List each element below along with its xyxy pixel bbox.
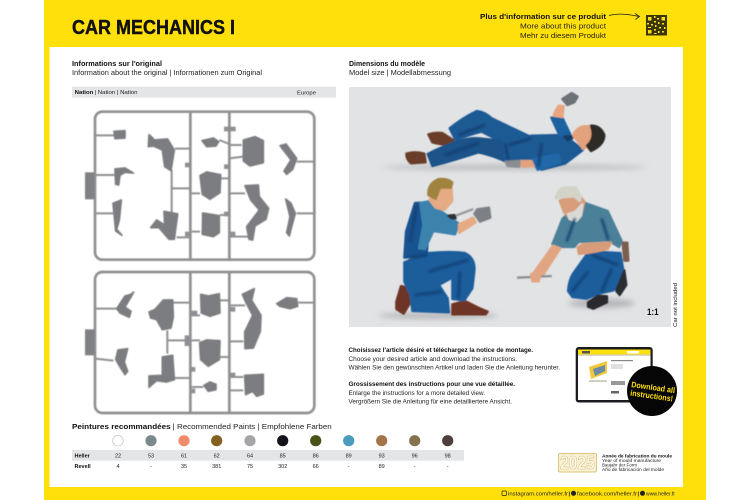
heading: recommended paints: Peintures recommandées	[72, 422, 171, 431]
nation row: Nation	[75, 90, 94, 96]
mould year text: Baujahr der Form	[602, 462, 637, 468]
figure: kneeling mechanic with wrench	[396, 179, 490, 314]
sprue A: top parts frame	[85, 112, 314, 260]
sprue A moulded parts	[113, 131, 297, 240]
heading: information about the original: Informations sur l'original	[72, 59, 162, 68]
heading: information about the original	[72, 59, 262, 77]
download instructions text: Grossissement des instructions pour une vue détaillée.	[348, 381, 515, 388]
download instructions text: Enlarge the instructions for a more detailed view.	[348, 390, 485, 397]
paint reference table: 96	[412, 454, 418, 460]
footer social links: |	[568, 492, 570, 498]
paint reference table: 22	[115, 454, 121, 460]
paint reference table: 85	[280, 454, 286, 460]
title: CAR MECHANICS I	[72, 17, 235, 39]
download badge: instructions!	[630, 389, 674, 403]
nation row	[72, 87, 336, 98]
paint reference table: 86	[313, 454, 319, 460]
product info link block: More about this product	[520, 22, 607, 30]
paint reference table: -	[150, 464, 152, 470]
footer social links: www.heller.fr	[645, 492, 675, 498]
paint reference table: -	[348, 464, 350, 470]
paint reference table: 75	[247, 464, 253, 470]
heading: information about the original: Information about the original | Informationen zum Original	[72, 68, 262, 77]
icon: QR code	[646, 15, 667, 36]
paint reference table: 62	[214, 454, 220, 460]
paint reference table: -	[447, 464, 449, 470]
download badge: Download all	[631, 380, 676, 395]
paint reference table: 93	[379, 454, 385, 460]
mould year text: Year of mould manufacture	[602, 458, 662, 463]
download instructions text: Choisissez l'article désiré et téléchargez la notice de montage.	[348, 347, 533, 354]
download badge	[627, 366, 677, 416]
mould year badge: 2025	[560, 453, 595, 473]
footer social links: |	[638, 492, 640, 498]
product info link block: Plus d'information sur ce produit	[480, 12, 607, 21]
figure: mechanic lying down	[406, 93, 604, 170]
tablet mockup	[576, 347, 653, 402]
paint reference table: 64	[247, 454, 253, 460]
download instructions text	[348, 347, 560, 406]
paint reference table: 98	[445, 454, 451, 460]
heading: recommended paints	[72, 422, 332, 431]
paint reference table: 381	[212, 464, 221, 470]
paint reference table: 61	[181, 454, 187, 460]
download instructions text: Wählen Sie den gewünschten Artikel und laden Sie die Anleitung herunter.	[348, 364, 560, 372]
figure illustration group	[378, 93, 648, 319]
paint reference table: 66	[313, 464, 319, 470]
figure shadows	[378, 165, 648, 319]
download instructions text: Vergrößern Sie die Anleitung für eine detailliertere Ansicht.	[348, 398, 512, 406]
product info link block: Mehr zu diesem Produkt	[520, 31, 607, 40]
sprue B: bottom parts frame	[85, 272, 314, 413]
paint colour swatches	[113, 435, 453, 446]
paint reference table: 302	[278, 464, 287, 470]
footer social links	[502, 491, 675, 498]
mould year text	[602, 454, 673, 472]
figure: crouching grey-haired mechanic	[517, 187, 628, 309]
heading: recommended paints: | Recommended Paints | Empfohlene Farben	[173, 422, 332, 431]
paint reference table	[72, 450, 464, 470]
paint reference table: 89	[379, 464, 385, 470]
car not included note: Car not included	[673, 283, 679, 327]
paint reference table: Revell	[74, 464, 91, 470]
download instructions text: Choose your desired article and download the instructions.	[348, 356, 517, 363]
figure photo backdrop	[349, 87, 671, 327]
paint reference table: 4	[116, 464, 120, 470]
nation row: | Nation | Nation	[94, 90, 138, 96]
paint reference table: -	[414, 464, 416, 470]
white content panel	[50, 47, 683, 487]
footer social links: facebook.com/heller.fr	[577, 492, 637, 498]
heading: model size: Model size | Modellabmessung	[349, 68, 451, 77]
paint reference table: 53	[148, 454, 154, 460]
footer social links: instagram.com/heller.fr	[508, 492, 568, 498]
paint reference table: 35	[181, 464, 187, 470]
nation row: Europe	[297, 90, 316, 96]
mould year text: Año de fabricación del molde	[602, 467, 665, 472]
scale label: 1:1	[647, 307, 658, 317]
heading: model size: Dimensions du modèle	[349, 59, 425, 68]
product info link block	[480, 12, 607, 40]
paint reference table: Heller	[74, 454, 91, 460]
heading: model size	[349, 59, 451, 77]
paint reference table: 89	[346, 454, 352, 460]
arrow to QR code	[609, 14, 640, 20]
sprue B moulded parts	[116, 289, 298, 396]
mould year text: Année de fabrication du moule	[602, 454, 673, 458]
